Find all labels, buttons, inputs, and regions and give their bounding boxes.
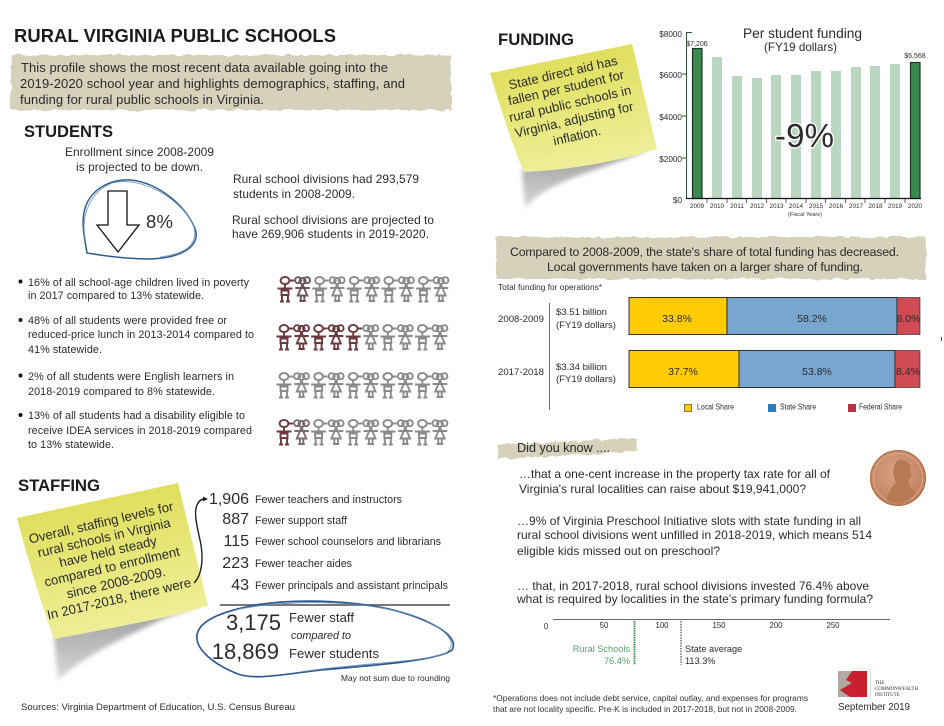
did you know label xyxy=(497,438,637,459)
row: 2017-2018 xyxy=(498,350,920,388)
staffing list: Fewer support staff xyxy=(255,515,347,527)
percent value: 8% xyxy=(146,211,173,232)
x axis labels: 2019 xyxy=(888,203,903,210)
y axis labels: $4000 xyxy=(659,113,682,122)
axis labels: 0 xyxy=(544,622,549,631)
staffing total callout xyxy=(197,601,453,677)
marker: rural schools: 76.4% xyxy=(604,656,630,666)
student statistics list: 13% of all students had a disability eligible to xyxy=(28,410,245,422)
staffing total callout: 18,869 xyxy=(212,639,279,664)
chart title: Per student funding xyxy=(743,26,862,41)
sticky note: staffing: Overall, staffing levels for xyxy=(27,499,175,547)
y axis labels xyxy=(659,30,682,205)
sticky note: staffing: compared to enrollment xyxy=(43,544,181,590)
did you know facts: … that, in 2017-2018, rural school divisions invested 76.4% above xyxy=(517,579,869,593)
enrollment totals: students in 2008-2009. xyxy=(233,187,355,201)
did you know facts: …that a one-cent increase in the property tax rate for all of xyxy=(519,467,831,481)
student statistics list: 48% of all students were provided free or xyxy=(28,315,227,327)
x axis labels xyxy=(690,203,923,218)
intro text: funding for rural public schools in Virginia. xyxy=(20,92,264,107)
did you know facts: what is required by localities in the state's primary funding formula? xyxy=(516,592,873,606)
sticky note: funding: inflation. xyxy=(552,123,602,148)
title: RURAL VIRGINIA PUBLIC SCHOOLS xyxy=(14,25,336,46)
chart caption: Total funding for operations* xyxy=(498,282,603,292)
rounding note: May not sum due to rounding xyxy=(341,673,450,683)
sticky note: staffing: In 2017-2018, there were xyxy=(46,575,192,622)
marker: rural schools xyxy=(573,621,634,666)
row: 2008-2009 xyxy=(498,298,920,334)
enrollment totals: have 269,906 students in 2019-2020. xyxy=(232,227,429,241)
row: 2008-2009: 2008-2009 xyxy=(498,314,544,325)
enrollment totals: Rural school divisions had 293,579 xyxy=(233,172,419,186)
bar value labels: $6,568 xyxy=(904,53,926,60)
bar value labels: $7,206 xyxy=(686,41,708,48)
bar chart: per student funding xyxy=(659,26,926,218)
change callout: -9% xyxy=(775,117,834,154)
x axis labels: 2015 xyxy=(809,203,824,210)
pictogram: poverty xyxy=(278,277,448,302)
y axis labels: $2000 xyxy=(659,155,682,164)
sticky note: funding xyxy=(490,44,657,208)
row: 2017-2018: $3.34 billion xyxy=(556,362,607,373)
enrollment callout xyxy=(83,180,196,259)
did you know facts: Virginia's rural localities can raise about $19,941,000? xyxy=(519,482,806,496)
axis labels: 200 xyxy=(769,621,783,630)
dot plot: required local effort xyxy=(544,620,890,666)
icon: penny xyxy=(870,450,926,506)
student statistics list: 2% of all students were English learners in xyxy=(28,371,234,383)
row: 2008-2009: 8.0% xyxy=(897,313,920,325)
axis labels: 50 xyxy=(600,621,609,630)
staffing total callout: compared to xyxy=(291,630,351,642)
did you know facts: rural school divisions went unfilled in 2018-2019, which means 514 xyxy=(517,528,872,542)
staffing list: Fewer teachers and instructors xyxy=(255,494,402,506)
sticky note: staffing: rural schools in Virginia xyxy=(36,515,173,560)
y axis labels: $6000 xyxy=(659,71,682,80)
staffing total callout: Fewer students xyxy=(289,646,379,661)
enrollment totals xyxy=(232,172,434,241)
student statistics list: to 13% statewide. xyxy=(28,439,114,451)
intro panel xyxy=(11,55,451,110)
enrollment caption: Enrollment since 2008-2009 xyxy=(65,145,214,159)
row: 2008-2009: 33.8% xyxy=(662,313,692,325)
logo: The Commonwealth Institute: COMMONWEALTH xyxy=(875,687,919,692)
sources: Sources: Virginia Department of Education, U.S. Census Bureau xyxy=(21,702,295,713)
staffing list: 1,906 xyxy=(209,491,249,508)
staffing list xyxy=(209,491,448,594)
bar value labels xyxy=(686,41,926,60)
logo: The Commonwealth Institute: INSTITUTE xyxy=(875,693,900,698)
logo: The Commonwealth Institute: THE xyxy=(875,681,884,686)
footnote: that are not locality specific. Pre-K is included in 2017-2018, but not in 2008-2009. xyxy=(493,704,797,714)
staffing list: 887 xyxy=(222,511,249,528)
intro text xyxy=(20,60,405,107)
x axis labels: 2013 xyxy=(769,203,784,210)
icon: down arrow xyxy=(97,191,139,252)
staffing list: Fewer teacher aides xyxy=(255,558,352,570)
marker: rural schools: Rural Schools xyxy=(573,644,630,654)
students heading: STUDENTS xyxy=(24,123,113,141)
chart title: (FY19 dollars) xyxy=(764,41,837,54)
legend: State Share xyxy=(780,402,816,412)
pictogram: English learners xyxy=(276,373,447,398)
row: 2008-2009: 58.2% xyxy=(797,313,827,325)
row: 2008-2009: $3.51 billion xyxy=(556,307,607,318)
staffing total callout: 3,175 xyxy=(226,610,281,635)
student statistics list xyxy=(18,277,254,451)
marker: state average: 113.3% xyxy=(685,656,715,666)
bars xyxy=(692,48,920,198)
publication date: September 2019 xyxy=(838,702,910,713)
chart title xyxy=(743,26,862,54)
student statistics list: 41% statewide. xyxy=(28,344,102,356)
enrollment caption: is projected to be down. xyxy=(76,160,203,174)
funding heading: FUNDING xyxy=(498,30,574,49)
funding share panel: Local governments have taken on a larger share of funding. xyxy=(547,260,863,274)
y axis labels: $0 xyxy=(673,196,682,205)
funding share panel: Compared to 2008-2009, the state's share of total funding has decreased. xyxy=(510,245,899,259)
arrow: note to staffing list xyxy=(194,496,208,583)
student statistics list: receive IDEA services in 2018-2019 compared xyxy=(28,425,252,437)
marker: state average xyxy=(681,621,742,666)
row: 2017-2018: 37.7% xyxy=(668,366,698,378)
x axis labels: 2010 xyxy=(710,203,725,210)
staffing list: 115 xyxy=(223,533,249,550)
staffing list: Fewer principals and assistant principals xyxy=(255,580,448,592)
row: 2017-2018: 2017-2018 xyxy=(498,367,544,378)
enrollment caption xyxy=(65,145,214,174)
axis labels: 150 xyxy=(712,621,726,630)
pictogram: disability xyxy=(276,420,447,444)
student statistics list: 16% of all school-age children lived in poverty xyxy=(28,277,250,289)
staffing list: 43 xyxy=(231,577,249,594)
row: 2008-2009: (FY19 dollars) xyxy=(556,320,616,331)
axis labels: 100 xyxy=(655,621,669,630)
axis labels xyxy=(544,621,840,631)
axis labels: 250 xyxy=(826,621,840,630)
hand-drawn circle xyxy=(83,180,196,259)
student statistics list: reduced-price lunch in 2013-2014 compared to xyxy=(28,329,254,341)
funding share panel xyxy=(496,237,926,279)
intro text: 2019-2020 school year and highlights demographics, staffing, and xyxy=(20,76,405,91)
legend: Local Share xyxy=(697,402,734,412)
x axis labels: 2020 xyxy=(908,203,923,210)
row: 2017-2018: 8.4% xyxy=(896,366,920,378)
x axis labels: 2017 xyxy=(849,203,864,210)
sticky note: staffing: have held steady xyxy=(58,533,159,570)
row: 2017-2018: 53.8% xyxy=(802,366,832,378)
x axis labels: 2011 xyxy=(730,203,744,210)
x axis labels: 2009 xyxy=(690,203,705,210)
legend: Federal Share xyxy=(859,402,902,412)
did you know facts: …9% of Virginia Preschool Initiative slots with state funding in all xyxy=(517,514,861,528)
student statistics list: 2018-2019 compared to 8% statewide. xyxy=(28,386,215,398)
sticky note: staffing: since 2008-2009. xyxy=(65,564,167,601)
x axis labels: 2014 xyxy=(789,203,804,210)
x axis labels: 2016 xyxy=(829,203,844,210)
marker: state average: State average xyxy=(685,644,742,654)
sticky note: funding: fallen per student for xyxy=(507,67,626,108)
row: 2017-2018: (FY19 dollars) xyxy=(556,374,616,385)
did you know label: Did you know .... xyxy=(517,440,610,455)
legend xyxy=(684,402,902,412)
staffing total callout: Fewer staff xyxy=(289,610,354,625)
x axis labels: 2012 xyxy=(750,203,765,210)
did you know facts: eligible kids missed out on preschool? xyxy=(517,544,720,558)
footnote xyxy=(493,693,808,714)
x axis labels: (Fiscal Years) xyxy=(788,212,822,218)
x axis labels: 2018 xyxy=(868,203,883,210)
stacked bar chart: funding shares xyxy=(498,282,920,412)
sticky note: funding: Virginia, adjusting for xyxy=(513,99,635,141)
sticky note: staffing xyxy=(17,483,208,680)
footnote: *Operations does not include debt service, capital outlay, and expenses for programs xyxy=(493,693,808,703)
enrollment totals: Rural school divisions are projected to xyxy=(232,213,434,227)
y axis labels: $8000 xyxy=(659,30,682,39)
sticky note: funding: rural public schools in xyxy=(507,82,633,125)
intro text: This profile shows the most recent data available going into the xyxy=(21,60,388,75)
staffing list: 223 xyxy=(222,555,249,572)
logo: The Commonwealth Institute xyxy=(838,671,919,698)
student statistics list: in 2017 compared to 13% statewide. xyxy=(28,290,204,302)
staffing heading: STAFFING xyxy=(18,476,100,495)
pictogram: free or reduced lunch xyxy=(276,325,447,350)
did you know facts xyxy=(516,467,873,606)
staffing list: Fewer school counselors and librarians xyxy=(255,536,441,548)
sticky note: funding: State direct aid has xyxy=(507,53,619,92)
